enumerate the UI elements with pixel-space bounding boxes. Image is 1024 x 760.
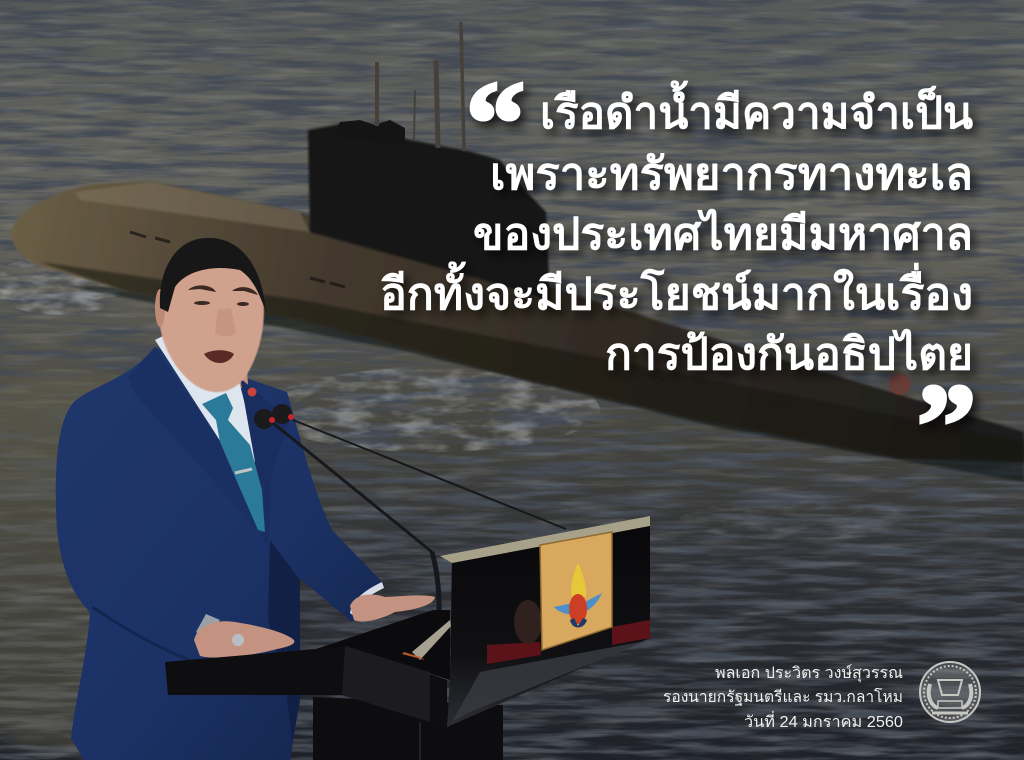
shirt (155, 335, 255, 462)
lectern (165, 516, 650, 760)
quote text (380, 57, 976, 491)
conning tower (308, 124, 550, 300)
left cuff (196, 614, 220, 640)
quote line 3: ของประเทศไทยมีมหาศาล (473, 208, 973, 259)
hull lower shade (40, 262, 1024, 462)
lapel pin (248, 388, 256, 396)
hull port marks (130, 232, 795, 408)
speaker title: รองนายกรัฐมนตรีและ รมว.กลาโหม (663, 687, 903, 706)
speaker (56, 238, 435, 760)
lapel (128, 347, 268, 548)
face (159, 264, 264, 392)
clip and hinge (412, 620, 451, 660)
hair (160, 238, 266, 312)
hull deck highlight (75, 182, 310, 232)
tie (202, 393, 265, 532)
lectern panel (447, 520, 650, 727)
suit (56, 347, 384, 760)
masts (377, 22, 464, 151)
mic stems (273, 420, 566, 640)
quote line 1: เรือดำน้ำมีความจำเป็น (540, 80, 973, 138)
submarine shadow (60, 285, 1024, 482)
reflected face (514, 600, 542, 644)
mouth (204, 350, 234, 363)
crew on tower (333, 120, 405, 146)
sleeve crease (92, 607, 190, 660)
lectern top surface (165, 610, 450, 680)
lectern base (313, 697, 503, 760)
eyes (188, 285, 258, 306)
seal emblem (920, 662, 980, 722)
neck (165, 330, 248, 400)
closing quote mark: ” (917, 360, 976, 491)
ear (155, 289, 165, 327)
submarine hull (10, 181, 1024, 462)
submarine (10, 22, 1024, 482)
opening quote mark: “ (466, 57, 525, 188)
lectern front edge (165, 646, 447, 727)
speaker name: พลเอก ประวิตร วงษ์สุวรรณ (715, 664, 903, 683)
hull marking (889, 373, 911, 395)
sea foam around submarine (0, 255, 920, 540)
tie clip (235, 469, 252, 473)
jacket lower shade (268, 540, 300, 742)
mic heads (254, 409, 274, 429)
quote line 4: อีกทั้งจะมีประโยชน์มากในเรื่อง (380, 261, 973, 319)
ring (232, 634, 244, 646)
quote line 5: การป้องกันอธิปไตย (605, 328, 973, 379)
right hand (350, 594, 435, 622)
panel top edge (440, 516, 650, 563)
microphones (254, 404, 566, 640)
gold plaque (540, 532, 612, 650)
plaque emblem (554, 563, 602, 628)
date: วันที่ 24 มกราคม 2560 (744, 710, 903, 731)
attribution (663, 664, 903, 731)
quote line 2: เพราะทรัพยากรทางทะเล (490, 150, 973, 199)
left hand (194, 621, 294, 658)
nose (215, 308, 236, 336)
panel red reflection (487, 620, 650, 664)
panel reflection (452, 640, 650, 722)
right cuff (350, 582, 384, 616)
